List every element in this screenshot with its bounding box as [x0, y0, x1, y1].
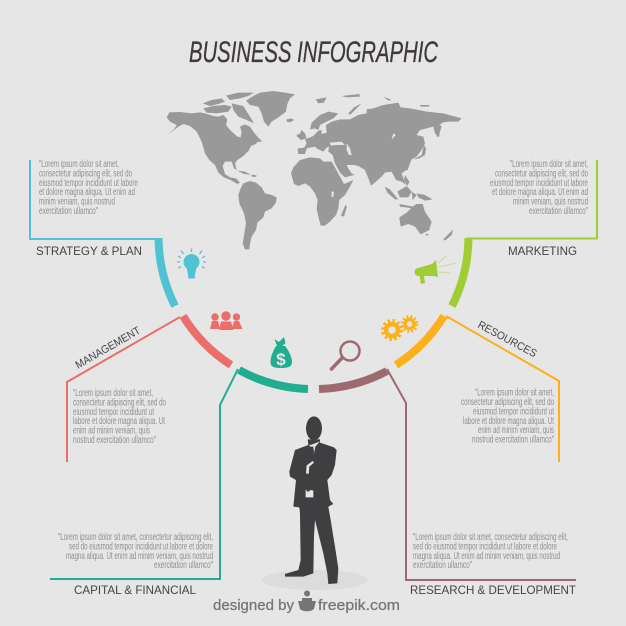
body text — [490, 159, 588, 217]
credit line — [213, 591, 400, 614]
label: MANAGEMENT — [74, 325, 143, 372]
body text: exercitation ullamco" — [413, 560, 472, 571]
canadian islands — [203, 93, 254, 123]
body text: minim veniam, quis nostrud — [39, 197, 115, 208]
body text: "Lorem ipsum dolor sit amet, consectetur adipiscing elit, — [58, 532, 213, 543]
arc segment — [396, 316, 444, 365]
connector line — [446, 316, 559, 462]
body text: eiusmod tempor incididunt ut labore — [39, 178, 138, 189]
body text: exercitation ullamco" — [154, 560, 213, 571]
credit line: designed by — [213, 597, 294, 614]
icon: team — [210, 311, 242, 330]
businessman silhouette — [285, 416, 338, 584]
body text: consectetur adipiscing elit, sed do — [461, 397, 554, 408]
icon: gears — [382, 316, 417, 340]
uk and ireland — [297, 130, 307, 140]
arctic islands — [316, 94, 430, 115]
icon: megaphone — [414, 256, 456, 284]
credit line: freepik.com — [318, 597, 400, 614]
icon: money bag — [270, 337, 292, 369]
world map — [166, 91, 462, 249]
body text: exercitation ullamco" — [529, 206, 588, 217]
body text: consectetur adipiscing elit, sed do — [73, 397, 166, 408]
panel: research and development — [319, 369, 577, 597]
eurasia — [298, 103, 462, 186]
icon: magnifier — [332, 342, 360, 369]
body text — [73, 388, 166, 446]
connector line — [467, 160, 597, 238]
body text: "Lorem ipsum dolor sit amet, — [475, 388, 554, 398]
body text — [58, 532, 213, 571]
arc segment — [452, 238, 468, 306]
label: RESEARCH & DEVELOPMENT — [410, 583, 577, 597]
scandinavia — [310, 112, 338, 130]
panel: management — [67, 316, 231, 462]
arc segment — [183, 316, 231, 365]
label: MARKETING — [508, 244, 577, 258]
south america — [238, 181, 277, 249]
body text: consectetur adipiscing elit, sed do — [39, 168, 132, 179]
freepik logo — [298, 591, 316, 611]
label: CAPITAL & FINANCIAL — [74, 583, 196, 597]
cuba and caribbean — [237, 171, 257, 177]
body text: "Lorem ipsum dolor sit amet, — [73, 388, 153, 399]
body text: eiusmod tempor incididunt ut — [473, 406, 554, 417]
body text: sed do eiusmod tempor incididunt ut labore et dolore — [69, 541, 213, 552]
icon: light bulb — [177, 248, 206, 278]
body text: exercitation ullamco" — [39, 206, 98, 217]
body text: labore et dolore magna aliqua. Ut — [463, 416, 554, 427]
body text: "Lorem ipsum dolor sit amet, — [39, 159, 119, 170]
title: BUSINESS INFOGRAPHIC — [189, 36, 438, 69]
body text: labore et dolore magna aliqua. Ut — [73, 416, 165, 427]
body text: nostrud exercitation ullamco" — [472, 435, 554, 446]
australia — [399, 204, 432, 234]
panel: strategy and plan — [30, 159, 175, 306]
arc segment — [239, 370, 308, 389]
iceland — [287, 118, 294, 122]
indonesia and philippines — [385, 167, 433, 208]
body text: magna aliqua. Ut enim ad minim veniam, quis nostrud — [66, 551, 213, 562]
arc segment — [319, 371, 387, 389]
body text: et dolore magna aliqua. Ut enim ad — [39, 187, 135, 198]
body text — [39, 159, 138, 217]
body text — [413, 532, 568, 571]
japan and sakhalin — [413, 127, 440, 159]
body text — [461, 388, 554, 446]
label: STRATEGY & PLAN — [36, 244, 142, 258]
connector line — [50, 369, 238, 579]
panel: resources — [396, 316, 559, 462]
arc segment — [158, 238, 175, 306]
africa — [291, 157, 353, 226]
body text: enim ad minim veniam, quis — [73, 426, 150, 437]
panel: marketing — [452, 159, 597, 306]
body text: eiusmod tempor incididunt ut — [73, 407, 154, 418]
madagascar — [341, 205, 347, 217]
connector line — [30, 160, 160, 239]
new zealand and tasmania — [425, 229, 453, 241]
icon: money bag: $ — [276, 350, 286, 369]
north america — [166, 112, 262, 184]
greenland — [246, 91, 295, 127]
inland seas — [330, 133, 396, 197]
body text: nostrud exercitation ullamco" — [73, 435, 156, 446]
connector line — [67, 317, 180, 462]
label: RESOURCES — [476, 319, 539, 360]
body text: enim ad minim veniam, quis — [478, 425, 554, 436]
panel: capital and financial — [50, 369, 308, 597]
connector line — [387, 369, 576, 580]
ground shadow — [262, 570, 368, 590]
